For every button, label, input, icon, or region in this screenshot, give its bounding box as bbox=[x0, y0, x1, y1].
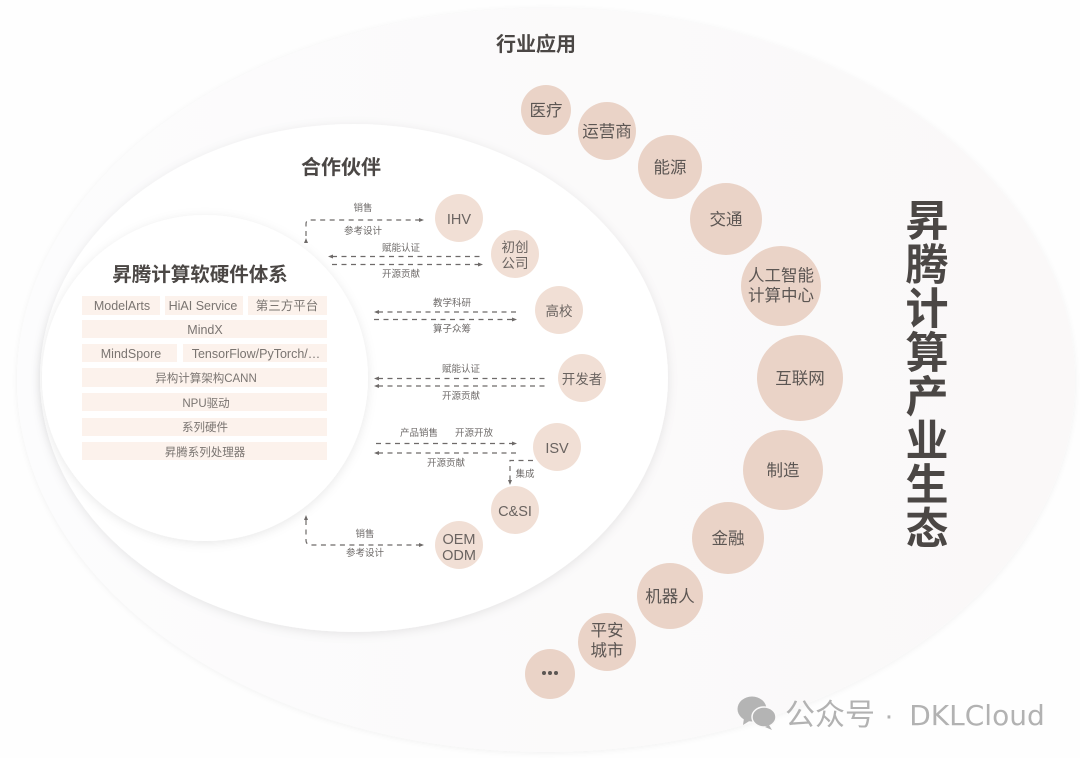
arrow: IHV sales and reference design bbox=[304, 202, 424, 243]
arrow: OEM ODM sales and reference design: 参考设计 bbox=[346, 547, 384, 559]
partner: IHV bbox=[435, 194, 483, 242]
industry: manufacturing: 制造 bbox=[766, 461, 800, 480]
partner: university: 高校 bbox=[546, 303, 573, 319]
industry: AI computing center: 计算中心 bbox=[748, 286, 814, 305]
stack row 4 bbox=[82, 368, 327, 387]
industry: internet: 互联网 bbox=[775, 369, 825, 388]
industry: energy: 能源 bbox=[654, 158, 686, 177]
industry: internet bbox=[757, 335, 843, 421]
heading: system: 昇腾计算软硬件体系 bbox=[112, 263, 288, 286]
stack row 1: ModelArts bbox=[94, 299, 150, 313]
main title: 业 bbox=[906, 418, 948, 466]
stack row 4: 异构计算架构CANN bbox=[155, 371, 257, 385]
stack row 2 bbox=[82, 320, 327, 338]
industry: safe city: 城市 bbox=[590, 641, 624, 660]
arrow: developer: 赋能认证 bbox=[442, 363, 480, 375]
watermark: 公众号 bbox=[785, 699, 875, 732]
stack row 6: 系列硬件 bbox=[182, 420, 228, 434]
stack row 7 bbox=[82, 442, 327, 460]
industry: transport: 交通 bbox=[710, 210, 742, 229]
stack row 3: MindSpore bbox=[101, 347, 161, 361]
arrow: startup enablement and open source bbox=[328, 242, 483, 280]
stack row 7: 昇腾系列处理器 bbox=[165, 445, 246, 459]
stack row 3 bbox=[82, 344, 327, 362]
partner: startup: 初创 bbox=[502, 239, 528, 255]
main title: 产 bbox=[906, 374, 948, 422]
arrow: ISV: 产品销售 bbox=[400, 427, 438, 439]
main title: 算 bbox=[906, 330, 948, 378]
main title: 计 bbox=[906, 286, 948, 334]
industry: transport bbox=[690, 183, 762, 255]
arrow: startup enablement and open source: 开源贡献 bbox=[382, 268, 420, 280]
partner: startup bbox=[491, 230, 539, 278]
arrow: university: 算子众筹 bbox=[433, 323, 471, 335]
industry: more bbox=[525, 649, 575, 699]
partner: startup: 公司 bbox=[502, 256, 528, 271]
main title: 腾 bbox=[906, 242, 948, 290]
industry: robotics bbox=[637, 563, 703, 629]
watermark: DKLCloud bbox=[909, 699, 1045, 732]
partner: OEM ODM: OEM bbox=[442, 532, 476, 548]
partner: OEM ODM bbox=[435, 521, 483, 569]
main title: 生 bbox=[906, 462, 948, 510]
industry: finance: 金融 bbox=[712, 529, 744, 548]
stack row 2: MindX bbox=[187, 323, 223, 337]
industry: energy bbox=[638, 135, 702, 199]
arrow: IHV sales and reference design: 销售 bbox=[353, 202, 373, 214]
industry: carrier bbox=[578, 102, 636, 160]
arrow: startup enablement and open source: 赋能认证 bbox=[382, 242, 420, 254]
arrow: university: 教学科研 bbox=[433, 297, 471, 309]
arrow: OEM ODM sales and reference design: 销售 bbox=[355, 528, 375, 540]
watermark bbox=[738, 696, 1045, 732]
partner: developer: 开发者 bbox=[562, 372, 602, 387]
stack row 6 bbox=[82, 418, 327, 436]
stack row 1: 第三方平台 bbox=[256, 298, 318, 313]
stack row 3: TensorFlow/PyTorch/… bbox=[192, 347, 320, 361]
arrow: OEM ODM sales and reference design bbox=[304, 515, 424, 559]
arrow: ISV bbox=[374, 427, 517, 469]
stack row 5: NPU驱动 bbox=[182, 397, 230, 410]
industry: AI computing center bbox=[741, 246, 821, 326]
arrow: ISV to C&SI integration bbox=[508, 460, 535, 485]
arrow: IHV sales and reference design: 参考设计 bbox=[344, 225, 382, 237]
partner: IHV: IHV bbox=[447, 212, 471, 228]
partner: developer bbox=[558, 354, 606, 402]
main title: 昇 bbox=[906, 198, 948, 246]
heading: partners: 合作伙伴 bbox=[301, 156, 381, 179]
industry: manufacturing bbox=[743, 430, 823, 510]
arrow: ISV to C&SI integration: 集成 bbox=[515, 468, 535, 480]
watermark: · bbox=[884, 700, 894, 732]
partner: C&SI: C&SI bbox=[498, 504, 532, 520]
industry: medical bbox=[521, 85, 571, 135]
industry: medical: 医疗 bbox=[530, 101, 562, 120]
stack row 1 bbox=[82, 296, 327, 315]
heading: industry applications: 行业应用 bbox=[496, 32, 576, 56]
industry: safe city bbox=[578, 613, 636, 671]
partner: ISV: ISV bbox=[545, 441, 569, 457]
partner: university bbox=[535, 286, 583, 334]
stack row 1: HiAI Service bbox=[169, 299, 237, 313]
panel: partner ellipse bbox=[40, 124, 668, 632]
partner: ISV bbox=[533, 423, 581, 471]
icon: chat bubbles bbox=[738, 696, 776, 730]
stack row 5 bbox=[82, 393, 327, 411]
arrow: developer bbox=[374, 363, 547, 402]
arrow: ISV: 开源开放 bbox=[455, 427, 493, 439]
main title: 态 bbox=[906, 506, 948, 554]
partner: OEM ODM: ODM bbox=[442, 548, 476, 564]
arrow: developer: 开源贡献 bbox=[442, 390, 480, 402]
panel: hardware and software system circle bbox=[42, 215, 368, 541]
industry: safe city: 平安 bbox=[590, 621, 624, 640]
arrow: university bbox=[374, 297, 517, 335]
industry: robotics: 机器人 bbox=[645, 587, 695, 606]
industry: AI computing center: 人工智能 bbox=[748, 266, 814, 285]
industry: finance bbox=[692, 502, 764, 574]
industry: carrier: 运营商 bbox=[582, 122, 632, 141]
partner: C&SI bbox=[491, 486, 539, 534]
arrow: ISV: 开源贡献 bbox=[427, 457, 465, 469]
